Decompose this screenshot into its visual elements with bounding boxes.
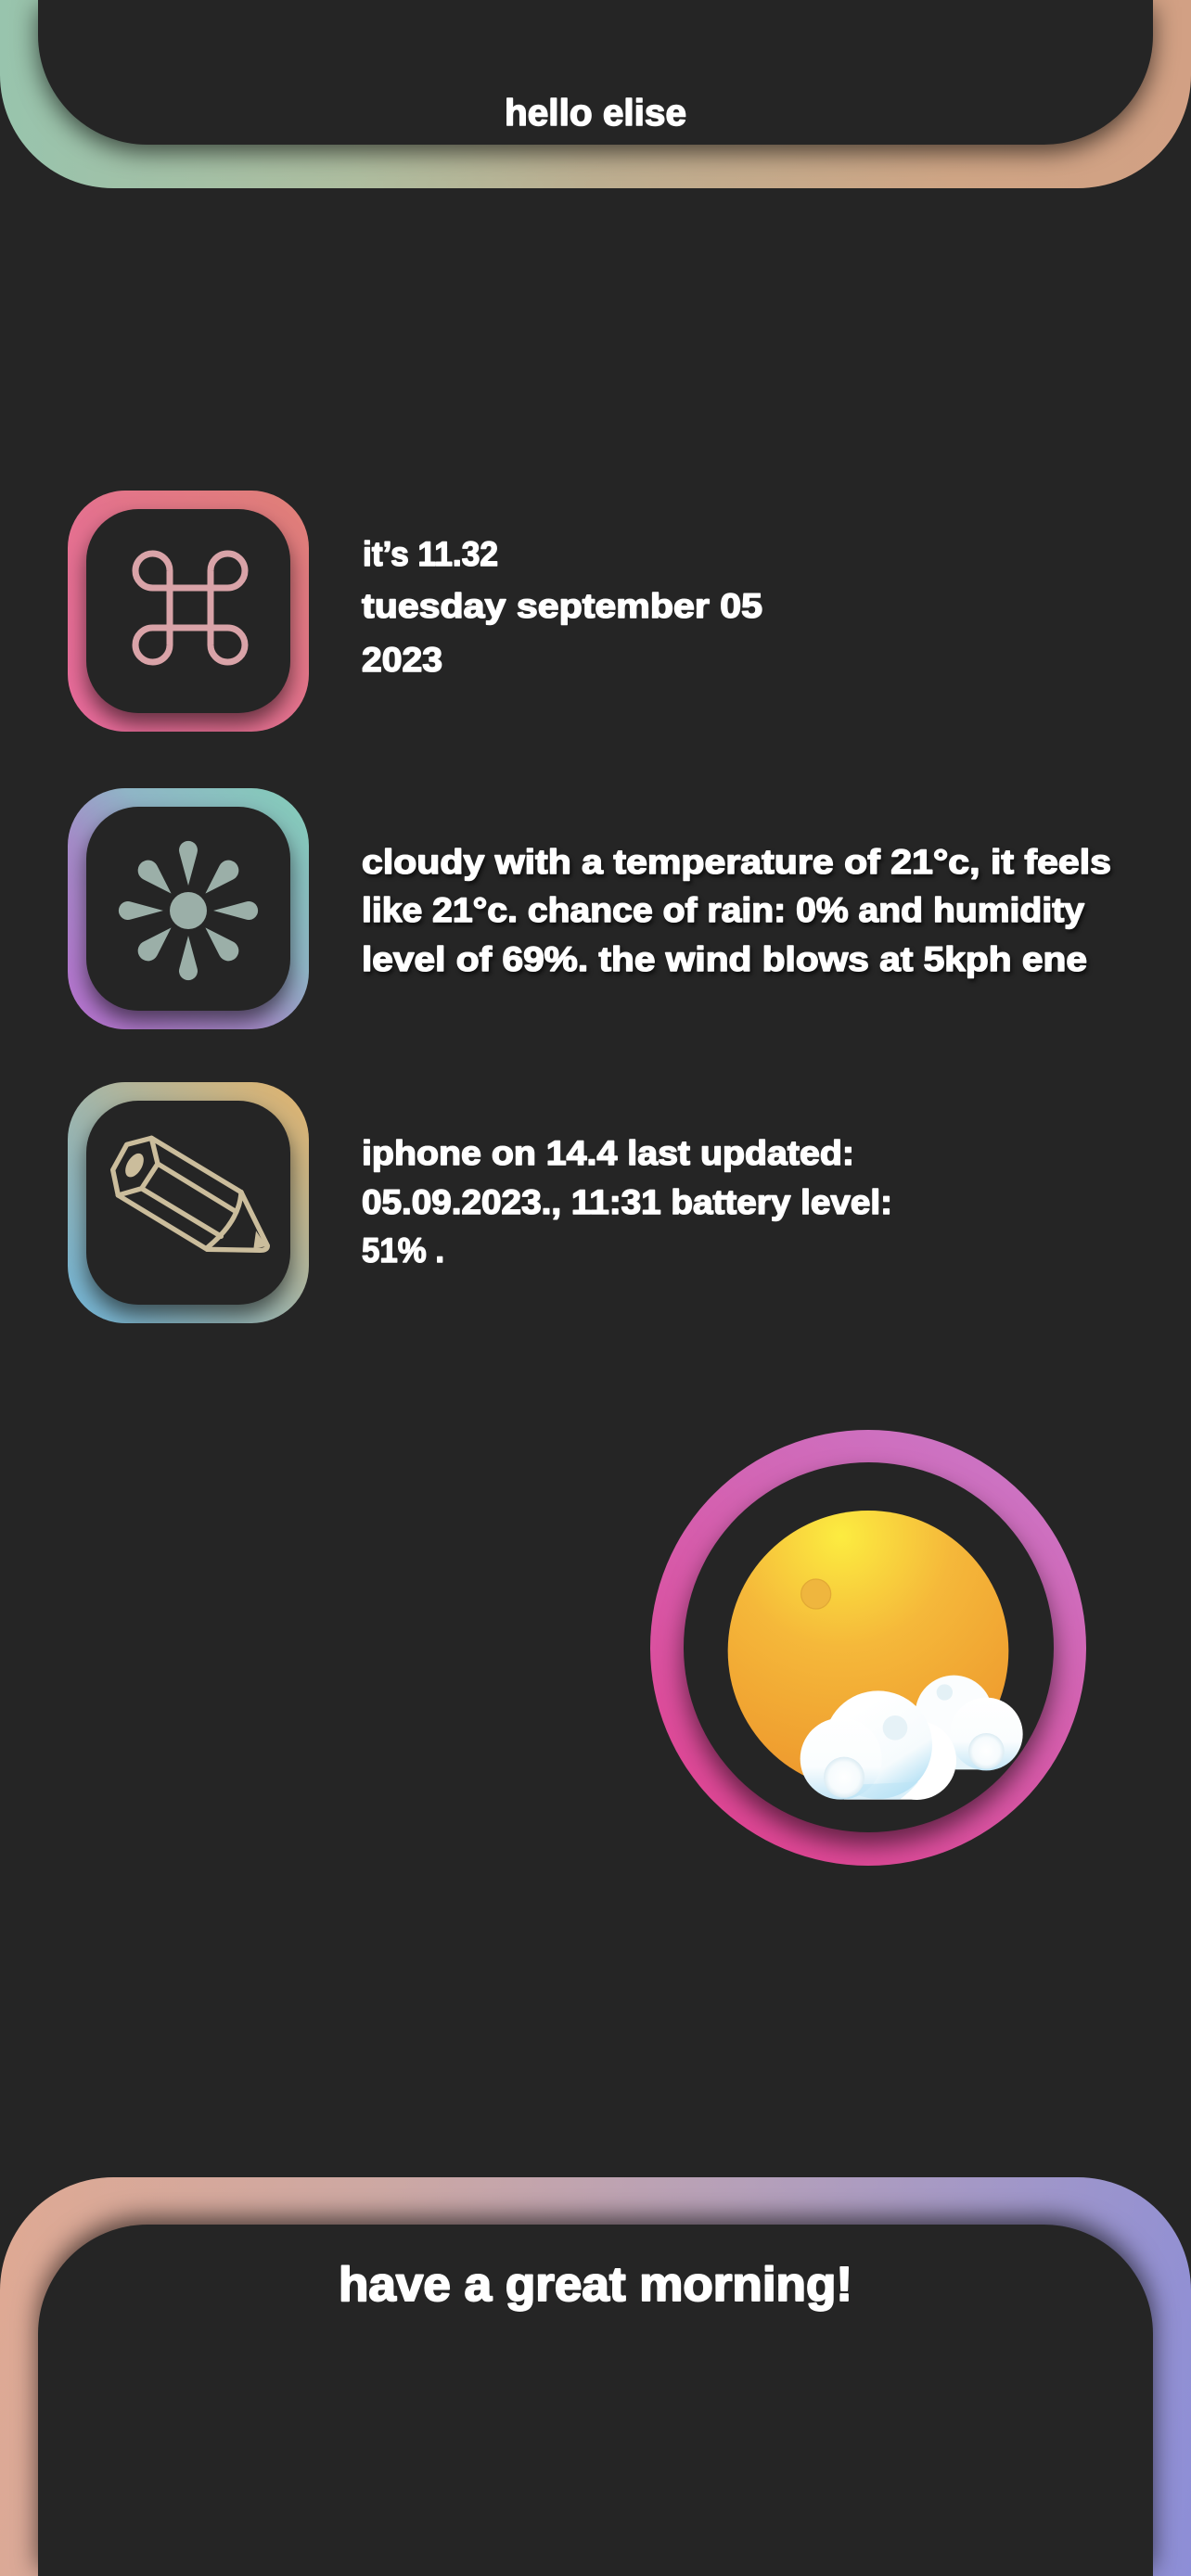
text block: device status: 51% .	[362, 1231, 444, 1269]
panel: bottom message frame	[0, 2177, 1191, 2576]
panel: device tile	[68, 1082, 309, 1323]
text block: device status	[362, 1134, 892, 1269]
sun disc	[728, 1511, 1008, 1792]
icon: sun and clouds	[727, 1511, 1023, 1800]
panel: weather badge ring	[650, 1430, 1086, 1866]
text block: time and date: it’s 11.32	[363, 535, 498, 573]
text block: weather summary: like 21°c. chance of rain: 0% and humidity	[362, 891, 1084, 929]
text block: weather summary: cloudy with a temperature of 21°c, it feels	[362, 843, 1111, 881]
text block: time and date: tuesday september 05	[362, 587, 762, 625]
text: have a great morning: have a great morning!	[339, 2258, 852, 2312]
panel: command tile	[68, 491, 309, 732]
text block: weather summary: level of 69%. the wind blows at 5kph ene	[362, 940, 1087, 978]
front cloud	[800, 1690, 956, 1800]
panel: top greeting frame	[0, 0, 1191, 188]
text block: device status: 05.09.2023., 11:31 battery level:	[362, 1183, 892, 1221]
text: hello elise: hello elise	[505, 93, 686, 134]
text block: time and date: 2023	[362, 641, 442, 679]
icon: spinner sun	[119, 840, 258, 981]
icon: pencil	[110, 1135, 270, 1253]
icon: command symbol	[132, 551, 249, 666]
panel: weather tile	[68, 788, 309, 1029]
text block: device status: iphone on 14.4 last updated:	[362, 1134, 854, 1172]
back cloud	[916, 1676, 1023, 1770]
text block: time and date	[362, 535, 762, 679]
text block: weather summary	[362, 843, 1113, 982]
